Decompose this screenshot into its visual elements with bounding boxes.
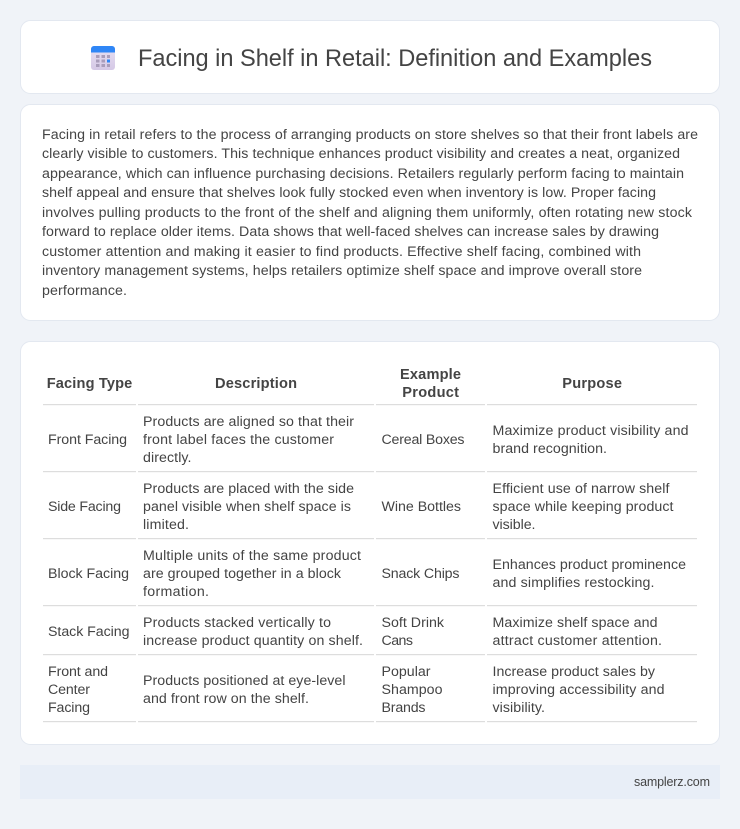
row: front and center facing: and front row on the shelf.: [143, 691, 309, 707]
row: block facing: [48, 548, 686, 600]
text block: paragraph: involves pulling products to the front of the shelf and aligning them uniformly, often rotating new stock: [42, 205, 693, 221]
panel: facing types table: [20, 342, 720, 744]
row: front facing: Products are aligned so that their: [143, 414, 354, 430]
panel: definition text: [20, 104, 720, 320]
table header: Example: [400, 367, 461, 383]
row: front and center facing: [48, 664, 664, 716]
icon: calendar: [91, 46, 115, 70]
text block: paragraph: customer attention and making it easier to find products. Effective shelf facing, combined with: [42, 244, 641, 260]
row: side facing: limited.: [143, 517, 189, 533]
table header: Purpose: [562, 376, 622, 392]
row: stack facing: Soft Drink: [382, 615, 445, 631]
row: front and center facing: Facing: [48, 700, 90, 716]
row: stack facing: Maximize shelf space and: [492, 615, 658, 631]
row: front and center facing: Increase product sales by: [492, 664, 656, 680]
row: side facing: Wine Bottles: [382, 499, 461, 515]
footer bar: [20, 765, 720, 799]
row: stack facing: Cans: [382, 633, 413, 649]
text block: paragraph: inventory management systems, helps retailers optimize shelf space and improve overall store: [42, 263, 642, 279]
row: block facing: Block Facing: [48, 566, 129, 582]
row: side facing: Products are placed with the side: [143, 481, 354, 497]
row: front and center facing: Center: [48, 682, 90, 698]
row: block facing: Snack Chips: [382, 566, 460, 582]
row: front facing: brand recognition.: [492, 441, 607, 457]
footer text: samplerz.com: [634, 775, 710, 789]
table header: Product: [402, 385, 459, 401]
row: front and center facing: Products positioned at eye-level: [143, 673, 346, 689]
row: front and center facing: Front and: [48, 664, 108, 680]
row: front and center facing: visibility.: [492, 700, 545, 716]
row: side facing: [48, 481, 674, 533]
row: stack facing: Products stacked vertically to: [143, 615, 331, 631]
table header: [47, 367, 622, 401]
text block: paragraph: performance.: [42, 283, 127, 299]
row: front facing: directly.: [143, 450, 192, 466]
row: block facing: are grouped together in a block: [143, 566, 342, 582]
row: block facing: and simplifies restocking.: [492, 575, 654, 591]
row: front and center facing: Popular: [382, 664, 431, 680]
row: front and center facing: Brands: [382, 700, 426, 716]
text block: paragraph: appearance, which can influence purchasing decisions. Retailers regularly perform facing to maintain: [42, 166, 684, 182]
row: side facing: panel visible when shelf space is: [143, 499, 351, 515]
row: front facing: Maximize product visibility and: [492, 423, 688, 439]
title: Facing in Shelf in Retail: Definition and Examples: [138, 46, 652, 72]
text block: paragraph: shelf appeal and ensure that shelves look fully stocked even when inventory is low. Proper facing: [42, 185, 656, 201]
table header: Facing Type: [47, 376, 132, 392]
row: side facing: Side Facing: [48, 499, 121, 515]
row: block facing: formation.: [143, 584, 209, 600]
row: side facing: Efficient use of narrow shelf: [492, 481, 670, 497]
text block: paragraph: Facing in retail refers to the process of arranging products on store shelves so that their front labels are: [42, 127, 698, 143]
table header: Description: [215, 376, 297, 392]
row: front facing: Cereal Boxes: [382, 432, 464, 448]
text block: paragraph: [42, 127, 698, 299]
text block: paragraph: forward to replace older items. Data shows that well-faced shelves can increase sales by drawing: [42, 224, 659, 240]
row: stack facing: attract customer attention.: [492, 633, 662, 649]
text block: paragraph: clearly visible to customers. This technique enhances product visibility and creates a neat, organized: [42, 146, 680, 162]
row: front and center facing: Shampoo: [382, 682, 443, 698]
row: front facing: Front Facing: [48, 432, 127, 448]
row: stack facing: [48, 615, 662, 649]
row: side facing: space while keeping product: [492, 499, 674, 515]
title card: [20, 20, 720, 94]
row: side facing: visible.: [492, 517, 536, 533]
row: front and center facing: improving accessibility and: [492, 682, 664, 698]
row: stack facing: increase product quantity on shelf.: [143, 633, 363, 649]
row: block facing: Enhances product prominence: [492, 557, 686, 573]
row: block facing: Multiple units of the same product: [143, 548, 361, 564]
row: front facing: [48, 414, 688, 466]
row: front facing: front label faces the customer: [143, 432, 334, 448]
row: stack facing: Stack Facing: [48, 624, 130, 640]
